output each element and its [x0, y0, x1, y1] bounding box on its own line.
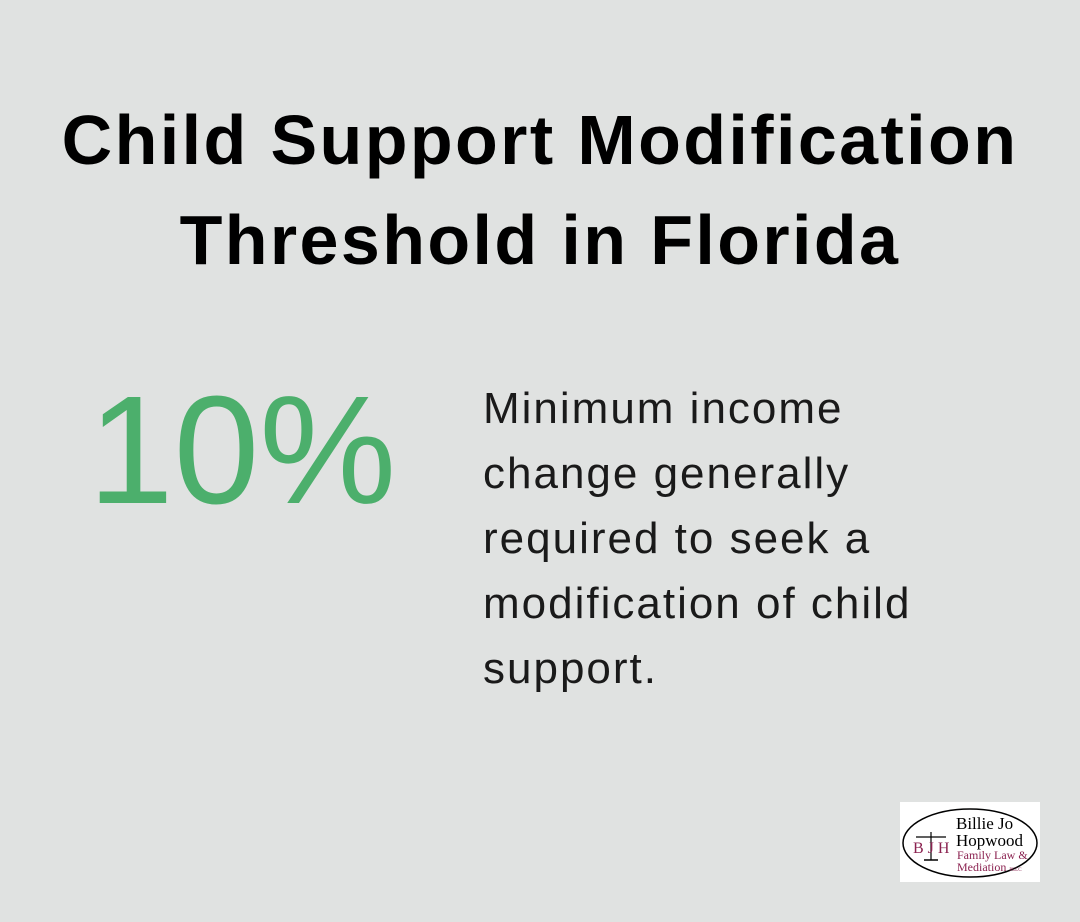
- description text: support.: [483, 644, 658, 693]
- logo: B J H: [913, 840, 950, 857]
- logo: [900, 802, 1040, 882]
- title: [62, 101, 1018, 279]
- description text: change generally: [483, 449, 850, 498]
- logo: Hopwood: [956, 831, 1024, 850]
- logo: Billie Jo: [956, 814, 1013, 833]
- logo: Mediation PLLC: [957, 860, 1022, 874]
- description text: [483, 384, 911, 693]
- logo: Family Law &: [957, 848, 1028, 862]
- title: Child Support Modification: [62, 101, 1018, 179]
- description text: required to seek a: [483, 514, 871, 563]
- big statistic: 10%: [88, 364, 396, 536]
- description text: Minimum income: [483, 384, 844, 433]
- title: Threshold in Florida: [180, 201, 900, 279]
- description text: modification of child: [483, 579, 911, 628]
